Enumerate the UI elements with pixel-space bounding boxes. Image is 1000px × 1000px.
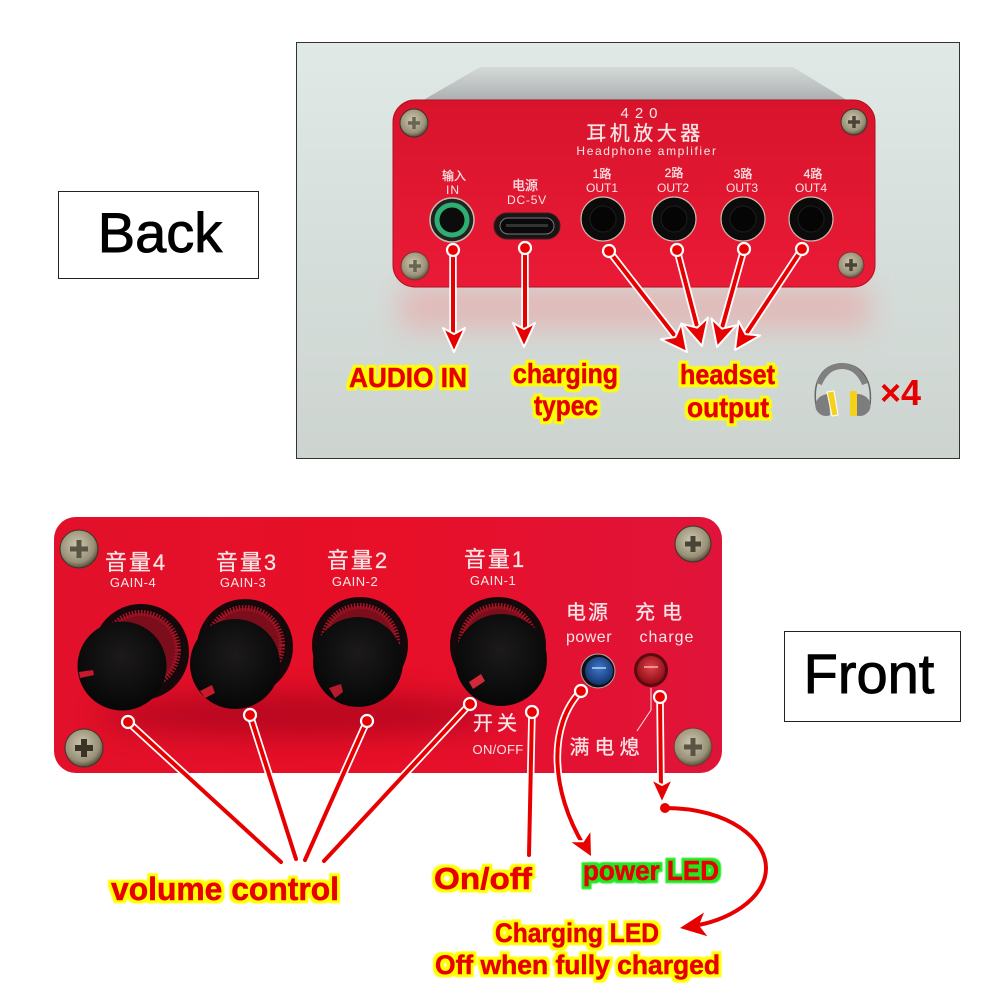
jack labels: DC-5V bbox=[507, 193, 547, 207]
jack labels: 4路 bbox=[804, 166, 822, 181]
panel: back of amplifier bbox=[296, 42, 960, 458]
LED labels: power bbox=[566, 629, 612, 646]
arrow: power LED bbox=[557, 685, 603, 864]
gain labels: 音量2 bbox=[327, 548, 389, 573]
jack labels: 电源 bbox=[512, 178, 538, 193]
label: charging typec bbox=[513, 358, 618, 421]
reflection under device bbox=[400, 285, 870, 330]
label: times four: ×4 bbox=[880, 372, 921, 413]
label: headset output: headset bbox=[680, 359, 775, 390]
icon: headphones bbox=[815, 364, 871, 416]
icon: output jacks bbox=[581, 197, 833, 241]
gain labels: GAIN-3 bbox=[220, 575, 266, 590]
label: AUDIO IN: AUDIO IN bbox=[349, 362, 467, 393]
switch label: 开关 bbox=[473, 712, 521, 735]
jack labels: OUT4 bbox=[795, 181, 827, 195]
label: headset output bbox=[680, 359, 775, 423]
knob: gain 2 bbox=[312, 597, 408, 707]
gain labels: GAIN-2 bbox=[332, 574, 378, 589]
label: power LED: power LED bbox=[583, 855, 719, 886]
LED labels bbox=[566, 601, 694, 646]
icon: red charge LED bbox=[634, 653, 668, 687]
label: On/off: On/off bbox=[434, 861, 533, 896]
red back plate bbox=[393, 100, 875, 287]
LED labels: charge bbox=[640, 629, 694, 646]
jack labels: OUT1 bbox=[586, 181, 618, 195]
note: off when full: 满电熄 bbox=[570, 736, 644, 759]
arrow: charge LED bbox=[651, 691, 673, 803]
label: Front: Front bbox=[804, 642, 935, 705]
arrow: audio in bbox=[443, 244, 465, 352]
arrow: charging port bbox=[513, 242, 535, 347]
jack labels: OUT3 bbox=[726, 181, 758, 195]
knob shadows bbox=[100, 693, 500, 737]
knob: gain 4 bbox=[78, 604, 189, 710]
label: volume control: volume control bbox=[111, 871, 339, 907]
panel: front of amplifier bbox=[54, 517, 722, 773]
note: off when full bbox=[570, 688, 651, 759]
back plate title: 耳机放大器 bbox=[586, 122, 704, 145]
knob: gain 3 bbox=[190, 599, 293, 709]
LED labels: 电源 bbox=[566, 601, 610, 624]
icon: front screws bbox=[60, 526, 712, 767]
back plate title bbox=[576, 105, 718, 158]
label: Off when fully charged: Off when fully charged bbox=[435, 950, 720, 980]
device top surface bbox=[420, 67, 850, 102]
knob: gain 1 bbox=[450, 597, 547, 706]
arrows: volume control bbox=[122, 698, 476, 862]
jack labels: 2路 bbox=[665, 165, 683, 180]
jack labels: 3路 bbox=[734, 166, 752, 181]
back plate title: Headphone amplifier bbox=[576, 144, 718, 158]
icon: type-c port bbox=[494, 213, 560, 239]
label: Front bbox=[784, 632, 960, 722]
jack labels: IN bbox=[446, 183, 460, 197]
gain labels: 音量4 bbox=[105, 550, 167, 575]
label: charging typec: typec bbox=[534, 390, 598, 421]
switch label: ON/OFF bbox=[473, 742, 523, 757]
gain labels: 音量3 bbox=[216, 550, 278, 575]
LED labels: 充电 bbox=[635, 601, 689, 624]
label: charging typec: charging bbox=[513, 358, 618, 389]
arrow: on/off bbox=[526, 706, 538, 855]
jack labels: 1路 bbox=[593, 166, 611, 181]
arrows: headset outputs bbox=[603, 243, 808, 360]
gain labels: GAIN-1 bbox=[470, 573, 516, 588]
jack labels: 输入 bbox=[442, 168, 466, 183]
back plate title: 420 bbox=[620, 105, 664, 122]
gain labels bbox=[105, 547, 526, 590]
label: Back: Back bbox=[98, 201, 223, 264]
switch label bbox=[473, 712, 523, 757]
label: Charging LED: Charging LED bbox=[495, 918, 659, 948]
jack labels bbox=[442, 165, 827, 207]
icon: blue power LED bbox=[581, 654, 615, 688]
label: headset output: output bbox=[687, 392, 769, 423]
gain labels: 音量1 bbox=[464, 547, 526, 572]
icon: audio in jack bbox=[430, 198, 474, 242]
label: Back bbox=[58, 192, 258, 278]
gain labels: GAIN-4 bbox=[110, 575, 156, 590]
arrow: charging LED curve bbox=[660, 803, 766, 940]
jack labels: OUT2 bbox=[657, 181, 689, 195]
icon: back screws bbox=[400, 109, 867, 280]
